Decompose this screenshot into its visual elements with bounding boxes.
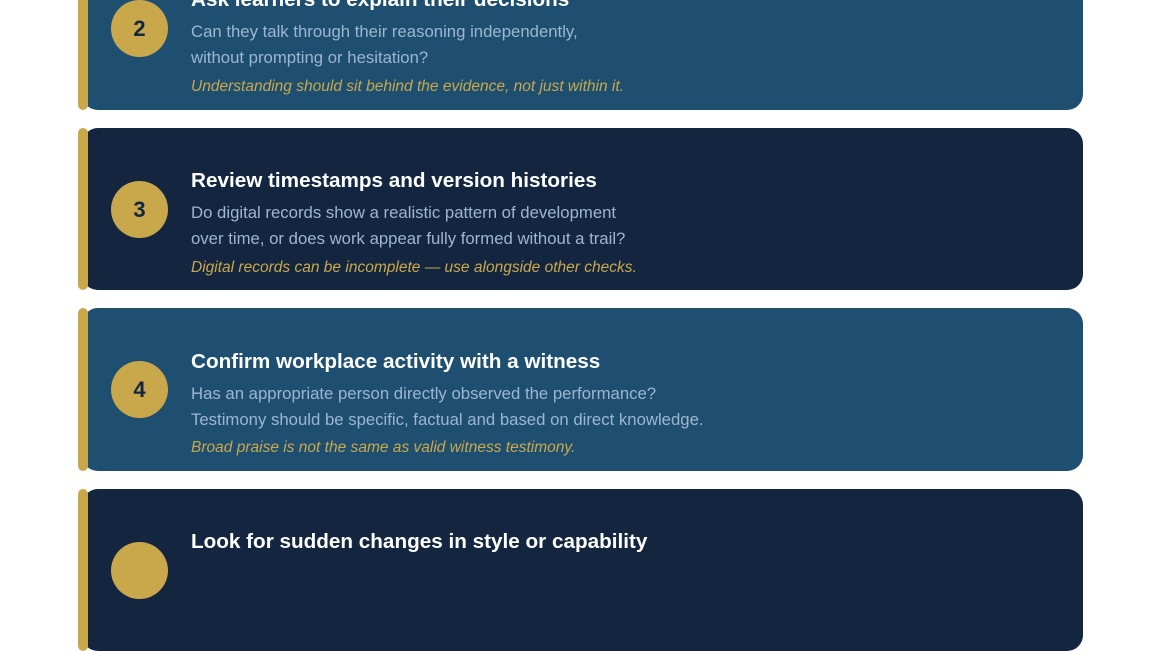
body text 3 (191, 203, 625, 248)
body text 3: over time, or does work appear fully formed without a trail? (191, 229, 625, 248)
body text 2 (191, 22, 578, 67)
card 2: explain decisions (78, 0, 1083, 110)
number badge 3: 3 (133, 197, 146, 222)
body text 4: Has an appropriate person directly observed the performance? (191, 384, 656, 403)
number badge 4 (111, 361, 168, 418)
card 4: witness (78, 308, 1083, 471)
body text 2: without prompting or hesitation? (191, 48, 428, 67)
number badge 2: 2 (133, 16, 146, 41)
number badge 3 (111, 181, 168, 238)
heading 3: Review timestamps and version histories (191, 169, 597, 192)
note 4: Broad praise is not the same as valid witness testimony. (191, 439, 575, 456)
card 3: timestamps (78, 128, 1083, 290)
note 3: Digital records can be incomplete — use alongside other checks. (191, 259, 637, 276)
note 2: Understanding should sit behind the evidence, not just within it. (191, 78, 624, 95)
heading 5: Look for sudden changes in style or capability (191, 530, 647, 553)
body text 3: Do digital records show a realistic pattern of development (191, 203, 616, 222)
body text 4: Testimony should be specific, factual and based on direct knowledge. (191, 410, 704, 429)
card 5: sudden changes (78, 489, 1083, 651)
number badge 4: 4 (133, 377, 146, 402)
body text 2: Can they talk through their reasoning independently, (191, 22, 578, 41)
number badge 2 (111, 0, 168, 57)
body text 4 (191, 384, 704, 429)
number badge 5 (111, 542, 168, 599)
heading 4: Confirm workplace activity with a witness (191, 350, 600, 373)
